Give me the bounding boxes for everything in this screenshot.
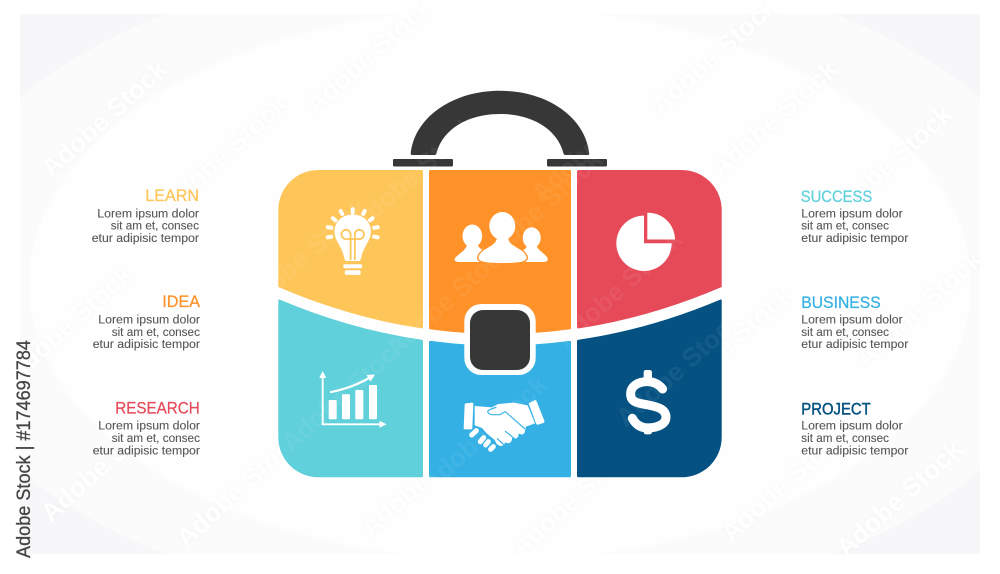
watermark pattern: Adobe Stock	[155, 89, 293, 218]
text block: learn: sit am et, consec	[111, 219, 199, 233]
stock id side label: Adobe Stock | #174697784	[14, 340, 35, 558]
text block: project: etur adipisic tempor	[801, 443, 908, 457]
text block: idea: etur adipisic tempor	[93, 337, 200, 351]
watermark pattern: Adobe Stock	[0, 259, 138, 388]
watermark over panels: Adobe Stock	[415, 369, 553, 498]
watermark over panels: Adobe Stock	[345, 109, 483, 238]
text block: idea: Lorem ipsum dolor	[98, 312, 200, 326]
text block: research: Lorem ipsum dolor	[98, 419, 200, 433]
watermark pattern: Adobe Stock	[355, 414, 493, 543]
watermark pattern: Adobe Stock	[820, 99, 958, 228]
panel: learn (yellow)	[278, 170, 423, 328]
text block: business: BUSINESS	[801, 293, 881, 312]
text block: research	[93, 398, 200, 457]
text block: success: Lorem ipsum dolor	[801, 206, 903, 220]
watermark pattern: Adobe Stock	[705, 54, 843, 183]
panel: team (orange)	[429, 170, 571, 334]
watermark over panels	[235, 79, 748, 498]
panel: project (navy)	[577, 299, 722, 477]
icon: handshake	[464, 400, 545, 449]
text block: business	[801, 293, 908, 351]
watermark over panels: Adobe Stock	[380, 234, 518, 363]
watermark pattern: Adobe Stock	[660, 279, 798, 408]
watermark pattern: Adobe Stock	[35, 54, 173, 183]
panel: success (red)	[577, 170, 722, 328]
watermark over panels: Adobe Stock	[275, 329, 413, 458]
text block: project	[801, 400, 908, 457]
watermark pattern: Adobe Stock	[705, 54, 843, 183]
panel: research (teal)	[278, 299, 423, 477]
watermark pattern: Adobe Stock	[850, 244, 988, 373]
briefcase clasp	[464, 304, 536, 375]
text block: success: etur adipisic tempor	[801, 231, 908, 245]
text block: learn	[92, 186, 199, 245]
panel: business (blue)	[429, 341, 571, 477]
text block: learn: LEARN	[145, 186, 199, 205]
watermark pattern: Adobe Stock	[35, 399, 173, 528]
text block: project: sit am et, consec	[801, 431, 889, 445]
watermark pattern: Adobe Stock	[35, 54, 173, 183]
watermark over panels: Adobe Stock	[525, 79, 663, 208]
text block: project: Lorem ipsum dolor	[801, 419, 903, 433]
watermark pattern: Adobe Stock	[660, 279, 798, 408]
watermark pattern: Adobe Stock	[155, 89, 293, 218]
text block: research: sit am et, consec	[112, 431, 200, 445]
watermark pattern: Adobe Stock	[505, 434, 643, 563]
text block: research: etur adipisic tempor	[93, 443, 200, 457]
icon detail: fingers	[472, 431, 493, 449]
icon: three people	[454, 212, 548, 263]
text block: learn: Lorem ipsum dolor	[97, 206, 199, 220]
watermark pattern: Adobe Stock	[830, 434, 968, 563]
text block: success: SUCCESS	[801, 187, 872, 206]
watermark pattern: Adobe Stock	[715, 419, 853, 548]
text block: idea	[93, 292, 201, 351]
icon: pie chart	[616, 213, 675, 271]
text block: business: etur adipisic tempor	[801, 337, 908, 351]
watermark pattern: Adobe Stock	[715, 419, 853, 548]
watermark over panels: Adobe Stock	[550, 224, 688, 353]
text block: idea: sit am et, consec	[112, 325, 200, 339]
watermark pattern: Adobe Stock	[820, 99, 958, 228]
watermark over panels: Adobe Stock	[610, 304, 748, 433]
watermark over panels: Adobe Stock	[470, 144, 608, 273]
watermark pattern: Adobe Stock	[35, 399, 173, 528]
text block: business: Lorem ipsum dolor	[801, 312, 903, 326]
icon: growth chart	[319, 371, 386, 428]
watermark pattern: Adobe Stock	[0, 259, 138, 388]
watermark pattern: Adobe Stock	[170, 424, 308, 553]
text block: project: PROJECT	[801, 400, 871, 419]
watermark pattern: Adobe Stock	[355, 414, 493, 543]
text block: learn: etur adipisic tempor	[92, 231, 199, 245]
briefcase handle	[393, 91, 607, 166]
text block: research: RESEARCH	[115, 398, 200, 417]
watermark pattern: Adobe Stock	[830, 434, 968, 563]
stock id side label: Adobe Stock | #174697784	[14, 340, 35, 558]
watermark pattern: Adobe Stock	[505, 434, 643, 563]
watermark over panels: Adobe Stock	[235, 191, 373, 320]
watermark pattern: Adobe Stock	[170, 424, 308, 553]
text block: business: sit am et, consec	[801, 325, 889, 339]
icon: dollar sign	[631, 370, 666, 434]
text block: success: sit am et, consec	[801, 219, 889, 233]
watermark pattern: Adobe Stock	[850, 244, 988, 373]
text block: success	[801, 187, 908, 245]
icon: light bulb	[328, 209, 378, 275]
text block: idea: IDEA	[162, 292, 201, 311]
